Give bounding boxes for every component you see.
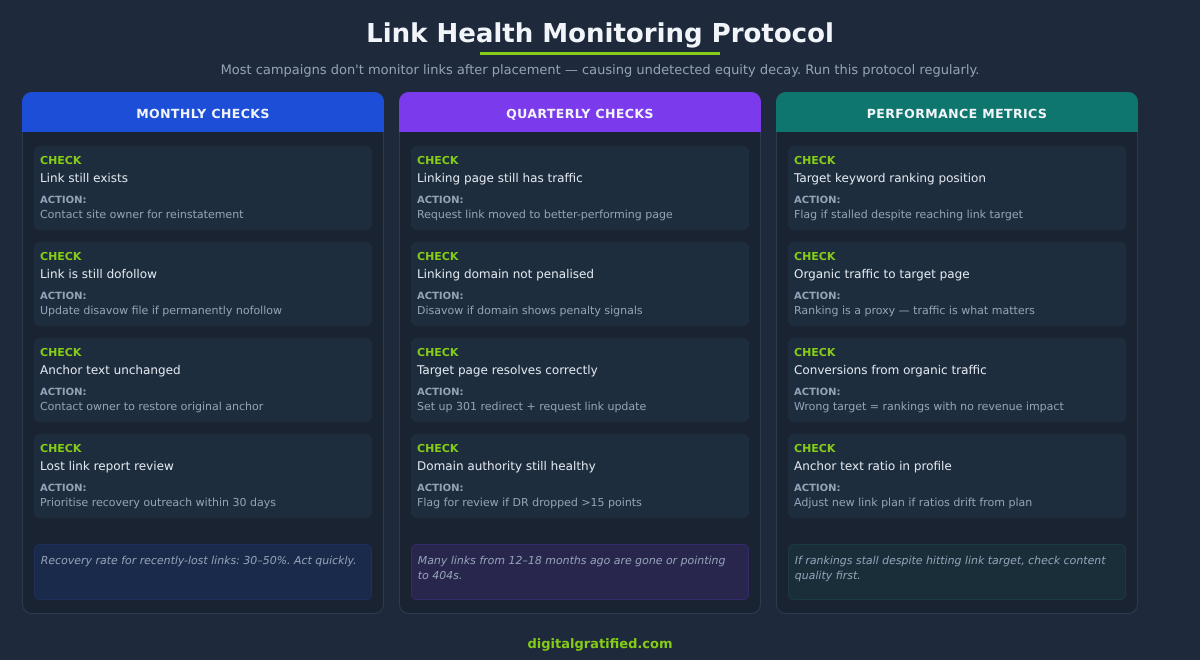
check card: link is still dofollow: ACTION: [40, 291, 86, 302]
check card: organic traffic: CHECK [794, 250, 835, 263]
heading: monthly checks [22, 92, 384, 132]
check card: linking domain not penalised: ACTION: [417, 291, 464, 302]
subtitle: Most campaigns don't monitor links after placement — causing undetected equity decay. Run this protocol regularly. [221, 63, 979, 78]
title underline [480, 52, 720, 55]
callout: old links [411, 544, 749, 600]
check card: link still exists: Contact site owner for reinstatement [40, 208, 243, 221]
check card: keyword ranking: Flag if stalled despite reaching link target [794, 208, 1023, 221]
check card: domain authority: Domain authority still healthy [417, 459, 596, 473]
check card: conversions: Conversions from organic traffic [794, 363, 987, 377]
heading: performance metrics: PERFORMANCE METRICS [867, 106, 1047, 121]
check card: linking domain not penalised: Linking domain not penalised [417, 267, 594, 281]
panel: quarterly checks [399, 92, 761, 614]
check card: linking page traffic: Request link moved to better-performing page [417, 208, 673, 221]
check card: target page resolves: CHECK [417, 346, 458, 359]
check card: link is still dofollow: CHECK [40, 250, 81, 263]
check card: anchor ratio: Anchor text ratio in profile [794, 459, 952, 473]
check card: domain authority [411, 434, 749, 518]
check card: anchor ratio: ACTION: [794, 483, 840, 494]
heading: monthly checks: MONTHLY CHECKS [136, 106, 270, 121]
check card: domain authority: Flag for review if DR dropped >15 points [417, 496, 642, 509]
check card: anchor ratio: CHECK [794, 442, 835, 455]
check card: target page resolves [411, 338, 749, 422]
check card: conversions: CHECK [794, 346, 835, 359]
check card: lost link report review: CHECK [40, 442, 81, 455]
callout: old links: Many links from 12–18 months ago are gone or pointing [418, 554, 725, 567]
check card: conversions: Wrong target = rankings with no revenue impact [794, 400, 1064, 413]
check card: lost link report review: ACTION: [40, 483, 86, 494]
check card: anchor text unchanged [34, 338, 372, 422]
check card: anchor text unchanged: ACTION: [40, 387, 86, 398]
check card: link still exists: CHECK [40, 154, 81, 167]
check card: lost link report review [34, 434, 372, 518]
check card: organic traffic [788, 242, 1126, 326]
check card: organic traffic: Organic traffic to target page [794, 267, 970, 281]
heading: quarterly checks [399, 92, 761, 132]
check card: linking page traffic: ACTION: [417, 195, 464, 206]
check card: conversions [788, 338, 1126, 422]
check card: linking page traffic [411, 146, 749, 230]
heading: quarterly checks: QUARTERLY CHECKS [506, 106, 654, 121]
check card: keyword ranking: Target keyword ranking position [794, 171, 986, 185]
footer brand: digitalgratified.com [527, 637, 672, 652]
check card: linking page traffic: CHECK [417, 154, 458, 167]
check card: link still exists: Link still exists [40, 171, 128, 185]
callout: rankings stall [788, 544, 1126, 600]
callout: recovery rate [34, 544, 372, 600]
check card: link is still dofollow [34, 242, 372, 326]
callout: recovery rate: Recovery rate for recently-lost links: 30–50%. Act quickly. [41, 554, 357, 567]
panel: monthly checks [22, 92, 384, 614]
heading: performance metrics [776, 92, 1138, 132]
check card: conversions: ACTION: [794, 387, 840, 398]
check card: anchor text unchanged: Anchor text unchanged [40, 363, 181, 377]
title: Link Health Monitoring Protocol [366, 19, 834, 49]
check card: organic traffic: Ranking is a proxy — traffic is what matters [794, 304, 1035, 317]
check card: link is still dofollow: Update disavow file if permanently nofollow [40, 304, 282, 317]
check card: target page resolves: Target page resolves correctly [417, 363, 598, 377]
callout: rankings stall: If rankings stall despite hitting link target, check content [795, 554, 1106, 567]
callout: rankings stall: quality first. [795, 569, 861, 582]
check card: domain authority: ACTION: [417, 483, 464, 494]
check card: keyword ranking [788, 146, 1126, 230]
check card: linking page traffic: Linking page still has traffic [417, 171, 583, 185]
check card: organic traffic: ACTION: [794, 291, 840, 302]
panel: performance metrics [776, 92, 1138, 614]
check card: anchor text unchanged: Contact owner to restore original anchor [40, 400, 263, 413]
check card: link is still dofollow: Link is still dofollow [40, 267, 157, 281]
check card: keyword ranking: CHECK [794, 154, 835, 167]
callout: old links: to 404s. [418, 569, 462, 582]
check card: lost link report review: Prioritise recovery outreach within 30 days [40, 496, 276, 509]
check card: anchor ratio [788, 434, 1126, 518]
check card: anchor text unchanged: CHECK [40, 346, 81, 359]
check card: domain authority: CHECK [417, 442, 458, 455]
check card: anchor ratio: Adjust new link plan if ratios drift from plan [794, 496, 1032, 509]
check card: link still exists: ACTION: [40, 195, 86, 206]
check card: keyword ranking: ACTION: [794, 195, 840, 206]
check card: linking domain not penalised: Disavow if domain shows penalty signals [417, 304, 643, 317]
check card: lost link report review: Lost link report review [40, 459, 174, 473]
check card: linking domain not penalised: CHECK [417, 250, 458, 263]
check card: target page resolves: ACTION: [417, 387, 464, 398]
check card: target page resolves: Set up 301 redirect + request link update [417, 400, 646, 413]
check card: linking domain not penalised [411, 242, 749, 326]
check card: link still exists [34, 146, 372, 230]
